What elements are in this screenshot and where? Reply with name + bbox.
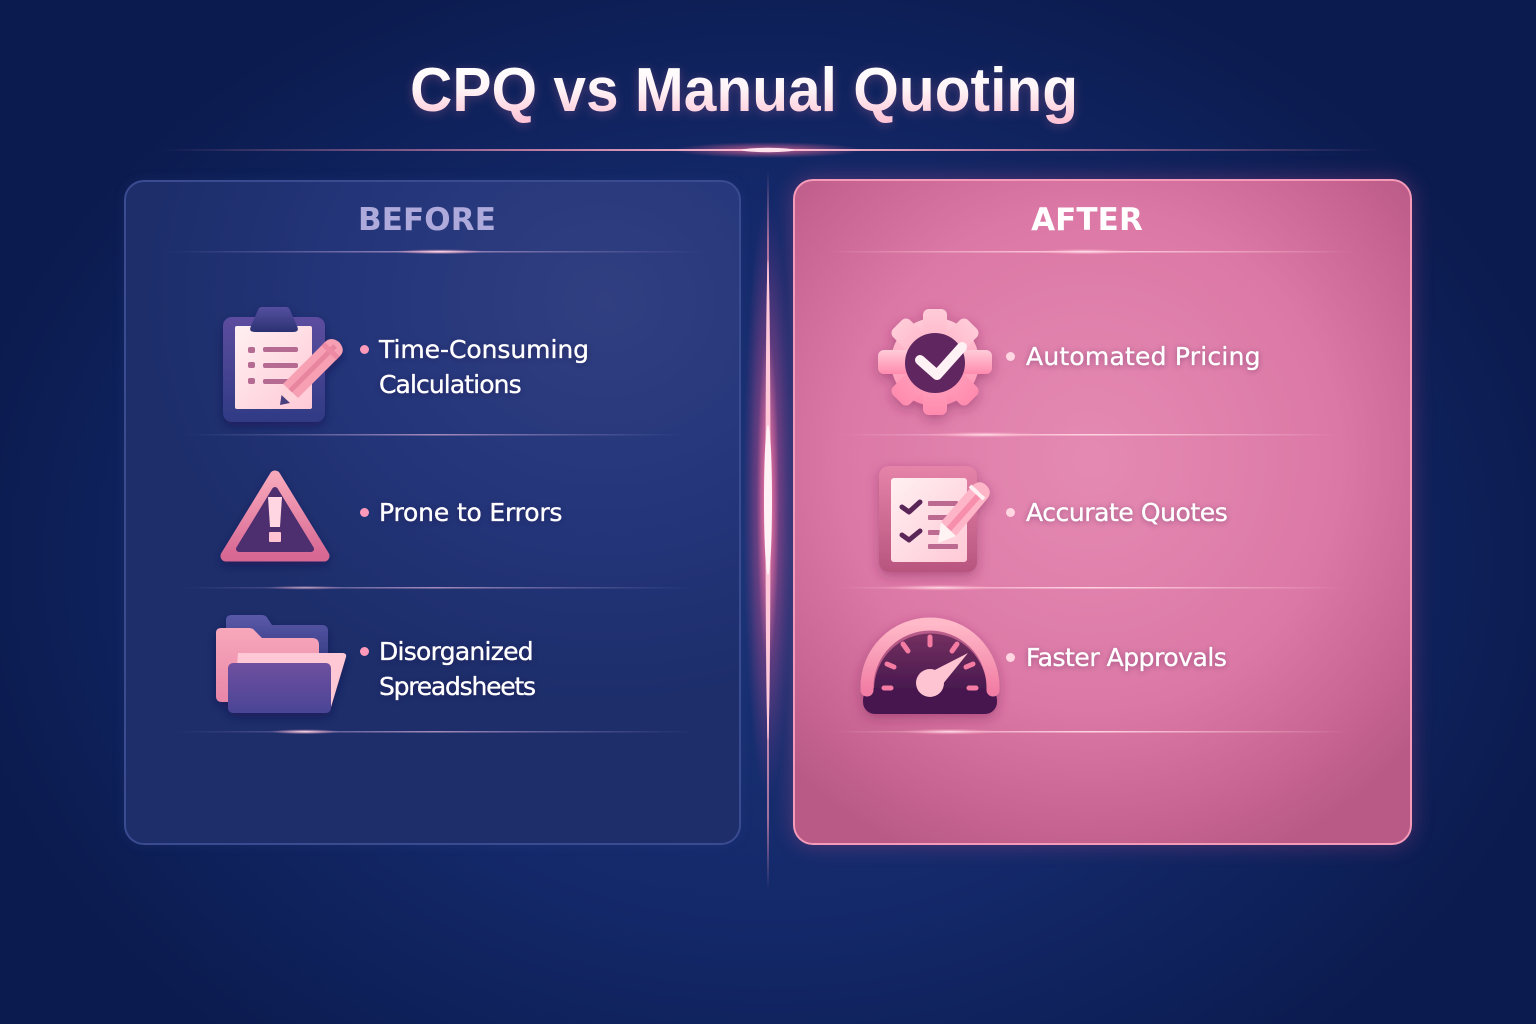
icon: checklist and pencil [879,466,990,572]
bullet: accurate quotes: Accurate Quotes [1026,498,1227,527]
icon: folders [216,615,346,713]
icon: speedometer [863,624,997,714]
bullet: disorganized: Spreadsheets [379,672,535,701]
bullet: disorganized [360,637,535,701]
panel: before [124,180,741,845]
bullet: disorganized: Disorganized [379,637,533,666]
bullet: time-consuming: Calculations [379,370,521,399]
panel: after [793,179,1412,845]
heading: after: AFTER [1031,202,1143,238]
bullet: prone to errors: Prone to Errors [379,498,562,527]
center vertical glow divider [744,174,791,886]
bullet: automated pricing: Automated Pricing [1026,342,1261,371]
heading: before: BEFORE [358,202,496,238]
icon: gear with check [878,309,992,415]
title: CPQ vs Manual Quoting [410,56,1078,125]
bullet: time-consuming [360,335,589,399]
icon: warning triangle [226,476,324,556]
bullet: time-consuming: Time-Consuming [379,335,589,364]
bullet: faster approvals: Faster Approvals [1026,643,1226,672]
icon: clipboard and pencil [223,307,343,422]
title divider glow [178,142,1362,158]
